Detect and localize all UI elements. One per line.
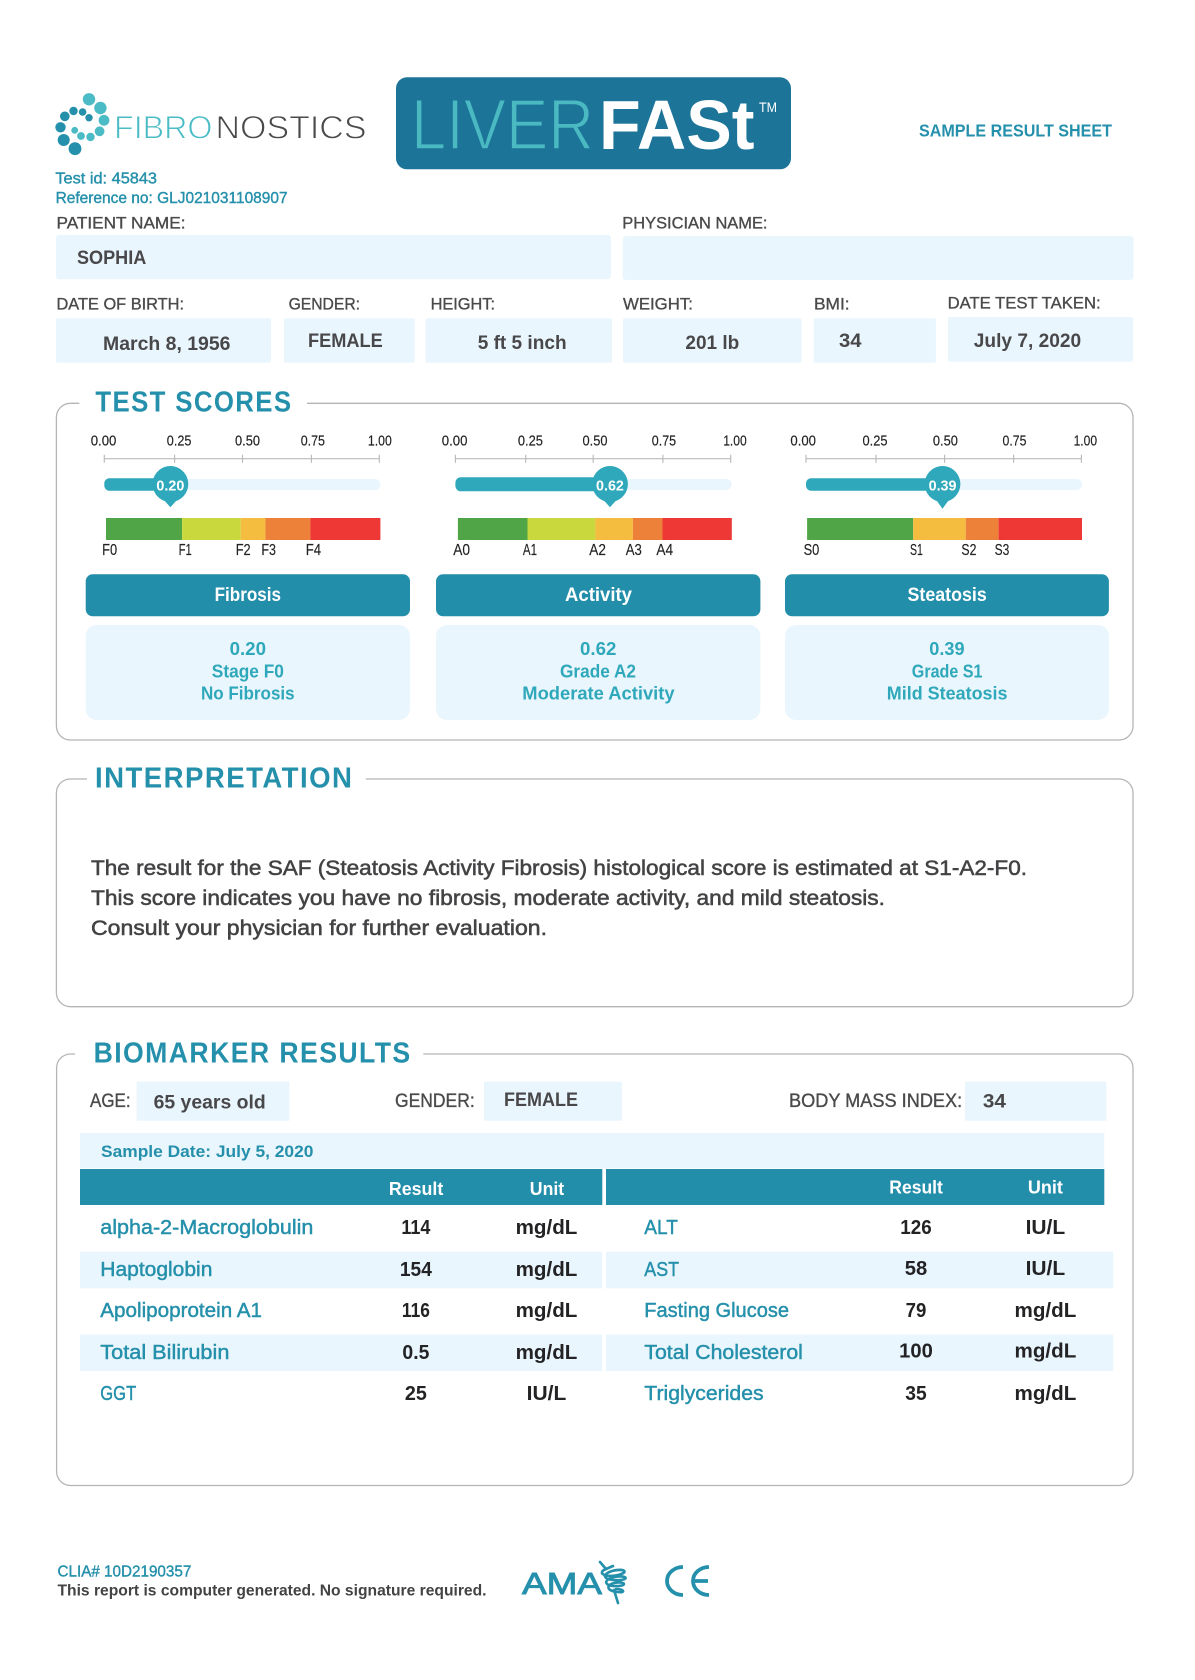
logo: LiverFASt banner: TM (759, 99, 777, 115)
logo wordmark: FIBRO (114, 109, 212, 145)
table: right biomarkers: mg/dL (1014, 1341, 1076, 1363)
table: left biomarkers: Total Bilirubin (100, 1342, 229, 1364)
chart: activity gauge: A0 (453, 542, 470, 559)
chart: steatosis gauge: 0.75 (1002, 432, 1026, 449)
table: left biomarkers: Haptoglobin (100, 1259, 212, 1281)
chart: activity gauge: A2 (589, 542, 606, 559)
table: left biomarkers: 116 (402, 1300, 430, 1322)
heading: sample result sheet: SAMPLE RESULT SHEET (919, 120, 1112, 140)
field: height: HEIGHT: (431, 294, 495, 314)
logo: LiverFASt banner (396, 77, 791, 169)
card: steatosis result: Mild Steatosis (887, 682, 1008, 703)
chart: fibrosis gauge: F0 (102, 542, 117, 559)
card: activity result: Activity (565, 585, 632, 606)
card: activity result (436, 574, 760, 720)
chart: steatosis gauge: 1.00 (1074, 432, 1097, 449)
field: patient name (56, 213, 611, 279)
card: activity result: Grade A2 (560, 660, 636, 681)
field: patient name: SOPHIA (77, 247, 146, 269)
sample date bar (80, 1133, 1104, 1168)
table: right biomarkers: Unit (1028, 1177, 1063, 1197)
field: date of birth: DATE OF BIRTH: (56, 294, 184, 314)
table: right biomarkers (606, 1169, 1113, 1405)
footer notes (58, 1564, 486, 1600)
chart: fibrosis gauge: F3 (261, 542, 276, 559)
icon: AMA logo (522, 1562, 626, 1603)
field: body mass index: BODY MASS INDEX: (789, 1091, 962, 1112)
test identifiers (55, 171, 288, 207)
heading: interpretation: INTERPRETATION (95, 763, 353, 795)
chart: steatosis gauge: S3 (995, 542, 1009, 559)
field: age: 65 years old (154, 1091, 266, 1113)
field: height (426, 294, 612, 363)
panel: interpretation (56, 763, 1133, 1007)
logo: LiverFASt banner: LIVER (411, 86, 594, 165)
chart: activity gauge: 1.00 (723, 432, 747, 449)
field: physician name (622, 213, 1134, 280)
field: gender: GENDER: (395, 1091, 475, 1112)
card: activity result: Moderate Activity (522, 682, 675, 703)
table: left biomarkers: alpha-2-Macroglobulin (100, 1217, 313, 1239)
field: gender: GENDER: (289, 294, 360, 314)
footer notes: This report is computer generated. No signature required. (58, 1583, 486, 1600)
table: left biomarkers: 25 (405, 1383, 427, 1405)
field: body mass index (789, 1082, 1106, 1121)
chart: activity gauge: 0.25 (518, 432, 543, 449)
field: gender (395, 1082, 622, 1121)
icon: AMA logo: AMA (522, 1566, 602, 1601)
chart: fibrosis gauge: 0.00 (91, 432, 116, 449)
table: right biomarkers: 58 (905, 1258, 927, 1280)
table: left biomarkers: mg/dL (516, 1342, 577, 1364)
chart: steatosis gauge: 0.25 (862, 432, 888, 449)
chart: fibrosis gauge: 1.00 (368, 432, 392, 449)
field: BMI: 34 (839, 330, 862, 352)
icon: dot cluster (55, 93, 109, 155)
table: right biomarkers: ALT (644, 1217, 678, 1239)
table: left biomarkers: mg/dL (516, 1300, 577, 1322)
logo: Fibronostics (55, 93, 367, 155)
table: right biomarkers: 100 (899, 1341, 933, 1363)
logo: LiverFASt banner: FASt (599, 86, 754, 164)
text block: interpretation body: Consult your physician for further evaluation. (91, 916, 547, 940)
table: left biomarkers: 114 (401, 1217, 431, 1239)
card: fibrosis result (86, 574, 410, 720)
chart: steatosis gauge: S2 (961, 542, 976, 559)
table: right biomarkers: Fasting Glucose (644, 1300, 789, 1322)
table: right biomarkers: 126 (900, 1217, 932, 1239)
chart: fibrosis gauge: 0.20 (156, 477, 184, 494)
chart: steatosis gauge: S1 (910, 542, 923, 559)
chart: steatosis gauge: 0.50 (933, 432, 958, 449)
field: weight (623, 294, 802, 363)
field: gender: FEMALE (504, 1089, 578, 1111)
table: left biomarkers: mg/dL (516, 1259, 577, 1281)
sample date bar: Sample Date: July 5, 2020 (101, 1142, 313, 1161)
field: date test taken: July 7, 2020 (974, 330, 1081, 352)
chart: fibrosis gauge: F4 (306, 542, 321, 559)
chart: activity gauge: 0.50 (582, 432, 608, 449)
card: fibrosis result: No Fibrosis (201, 682, 295, 703)
card: fibrosis result: Fibrosis (215, 585, 281, 606)
chart: fibrosis gauge: 0.75 (301, 432, 325, 449)
table: right biomarkers: IU/L (1026, 1217, 1065, 1239)
field: gender (284, 294, 415, 363)
field: BMI: BMI: (814, 294, 850, 314)
field: height: 5 ft 5 inch (478, 332, 567, 354)
panel: biomarker results (57, 1038, 1133, 1486)
chart: fibrosis gauge: 0.50 (235, 432, 260, 449)
table: right biomarkers: 79 (906, 1300, 926, 1322)
panel: test scores (56, 387, 1133, 740)
field: date test taken (948, 294, 1133, 362)
table: right biomarkers: IU/L (1026, 1258, 1065, 1280)
card: fibrosis result: Stage F0 (212, 660, 284, 681)
field: weight: WEIGHT: (623, 294, 693, 314)
field: date of birth (56, 294, 271, 363)
chart: fibrosis gauge: F2 (236, 542, 251, 559)
chart: steatosis gauge (790, 432, 1097, 559)
table: left biomarkers: 0.5 (402, 1342, 429, 1364)
text block: interpretation body: The result for the SAF (Steatosis Activity Fibrosis) histological score is estimated at S1-A2-F0. (91, 856, 1027, 880)
chart: fibrosis gauge: F1 (179, 542, 192, 559)
table: right biomarkers: Triglycerides (644, 1383, 764, 1405)
heading: test scores: TEST SCORES (95, 387, 292, 419)
table: left biomarkers: Apolipoprotein A1 (100, 1300, 262, 1322)
logo wordmark: NOSTICS (216, 109, 366, 145)
chart: activity gauge: 0.75 (652, 432, 676, 449)
chart: activity gauge: A1 (523, 542, 537, 559)
chart: steatosis gauge: S0 (804, 542, 819, 559)
field: date of birth: March 8, 1956 (103, 333, 231, 355)
field: BMI (814, 294, 936, 363)
text block: interpretation body: This score indicates you have no fibrosis, moderate activity, and mild steatosis. (91, 886, 885, 910)
field: physician name: PHYSICIAN NAME: (622, 213, 768, 232)
table: left biomarkers: Unit (530, 1179, 564, 1199)
chart: activity gauge: A4 (656, 542, 673, 559)
chart: steatosis gauge: 0.39 (929, 477, 956, 494)
chart: fibrosis gauge (91, 432, 392, 559)
table: left biomarkers: GGT (100, 1383, 136, 1405)
field: weight: 201 lb (685, 332, 739, 354)
table: right biomarkers: Total Cholesterol (644, 1342, 803, 1364)
table: right biomarkers: Result (889, 1177, 943, 1197)
table: right biomarkers: mg/dL (1014, 1383, 1076, 1405)
field: age (90, 1082, 289, 1121)
table: right biomarkers: mg/dL (1014, 1300, 1076, 1322)
chart: steatosis gauge: 0.00 (790, 432, 816, 449)
chart: activity gauge: A3 (626, 542, 642, 559)
table: left biomarkers: Result (389, 1179, 443, 1199)
chart: activity gauge (442, 432, 747, 559)
field: age: AGE: (90, 1091, 131, 1112)
card: steatosis result: 0.39 (929, 638, 965, 659)
card: activity result: 0.62 (580, 638, 616, 659)
field: gender: FEMALE (308, 330, 383, 352)
table: left biomarkers: mg/dL (516, 1217, 577, 1239)
field: date test taken: DATE TEST TAKEN: (948, 294, 1101, 312)
table: left biomarkers (80, 1169, 602, 1405)
card: steatosis result: Grade S1 (912, 660, 982, 681)
chart: activity gauge: 0.62 (596, 477, 624, 494)
table: right biomarkers: AST (644, 1259, 679, 1281)
test identifiers: Test id: 45843 (55, 171, 157, 188)
chart: activity gauge: 0.00 (442, 432, 468, 449)
card: steatosis result (785, 574, 1109, 720)
card: fibrosis result: 0.20 (230, 638, 266, 659)
test identifiers: Reference no: GLJ021031108907 (56, 190, 288, 207)
logo wordmark (114, 109, 366, 145)
patient details form (56, 213, 1134, 363)
table: right biomarkers: 35 (905, 1383, 927, 1405)
card: steatosis result: Steatosis (908, 585, 987, 606)
heading: biomarker results: BIOMARKER RESULTS (94, 1038, 412, 1070)
icon: CE mark (667, 1567, 709, 1595)
footer notes: CLIA# 10D2190357 (58, 1564, 191, 1581)
table: left biomarkers: IU/L (527, 1383, 566, 1405)
text block: interpretation body (91, 856, 1027, 940)
field: patient name: PATIENT NAME: (56, 213, 186, 232)
table: left biomarkers: 154 (400, 1259, 433, 1281)
chart: fibrosis gauge: 0.25 (167, 432, 191, 449)
field: body mass index: 34 (983, 1090, 1006, 1112)
